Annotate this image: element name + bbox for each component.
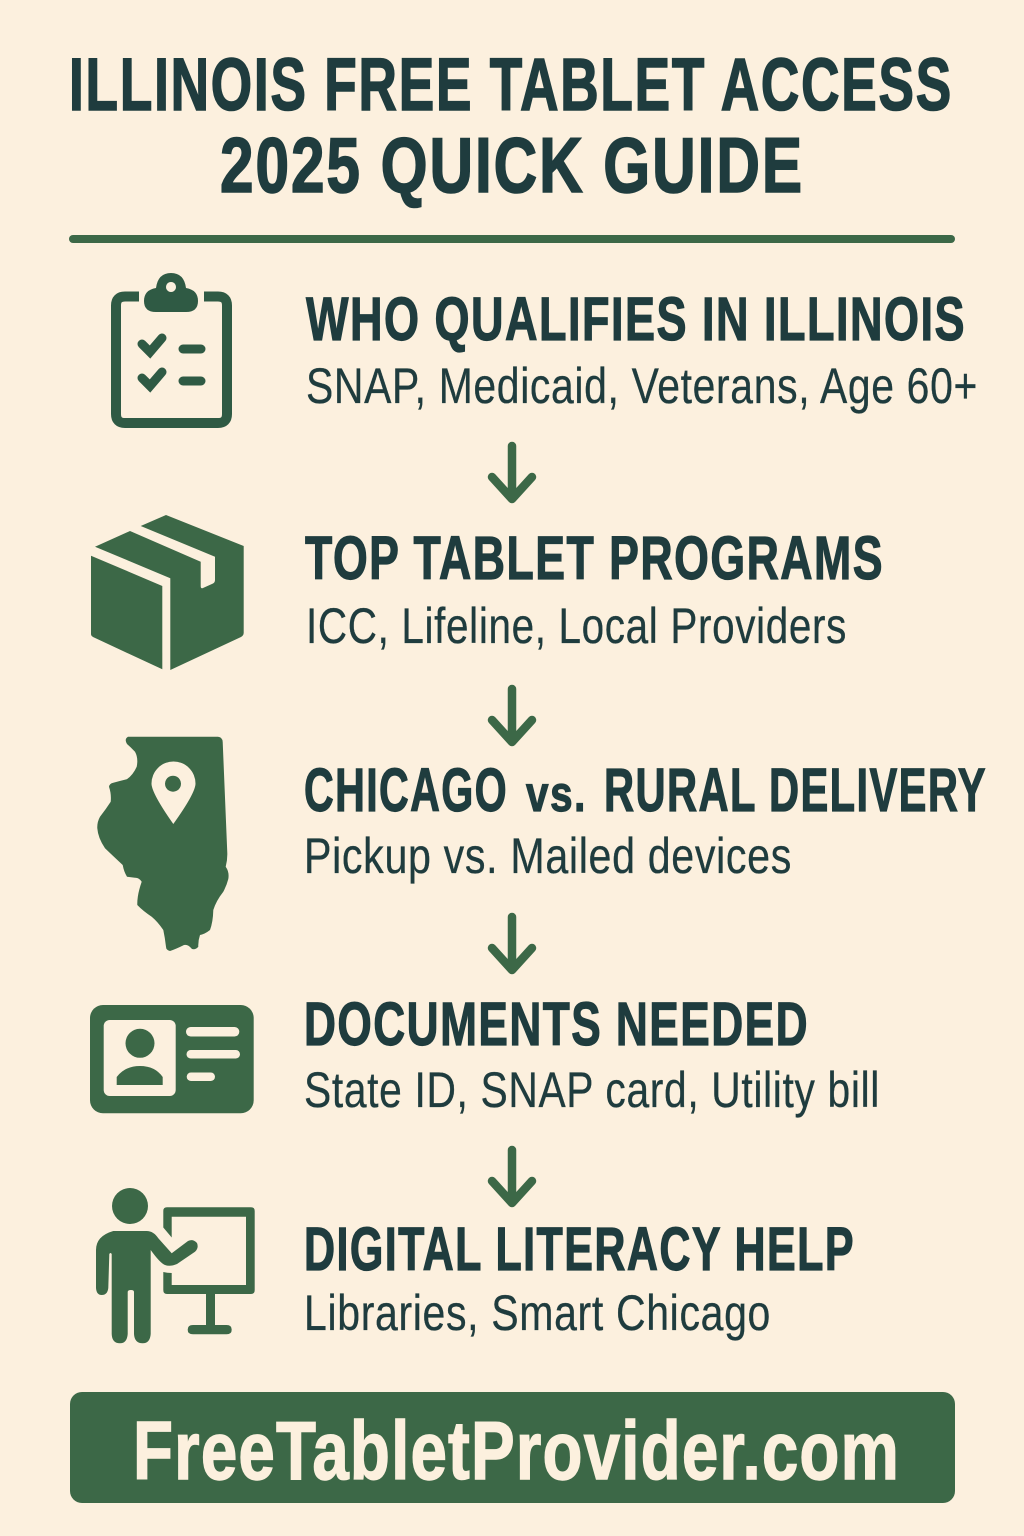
arrow 3 [492,917,532,970]
arrow 2 [492,689,532,742]
title [69,43,953,209]
arrow 1 [492,446,532,499]
text: digital literacy detail: Libraries, Smart Chicago [304,1285,771,1341]
title: 2025 QUICK GUIDE [220,121,804,209]
icon: package box [91,515,244,670]
heading: documents: DOCUMENTS NEEDED [304,990,809,1058]
heading: chicago vs rural: vs. [526,766,587,822]
text: delivery detail: Pickup vs. Mailed devices [304,828,792,884]
icon: clipboard checklist [116,273,227,423]
icon: ID card [90,1005,254,1113]
icon: Illinois map with pin [97,737,229,951]
icon: instructor at board [96,1188,255,1343]
heading: chicago vs rural: CHICAGO [304,756,508,824]
heading: chicago vs rural [304,756,987,824]
text: documents detail: State ID, SNAP card, Utility bill [304,1062,880,1118]
arrow 4 [492,1150,532,1203]
text: programs detail: ICC, Lifeline, Local Providers [306,598,847,654]
